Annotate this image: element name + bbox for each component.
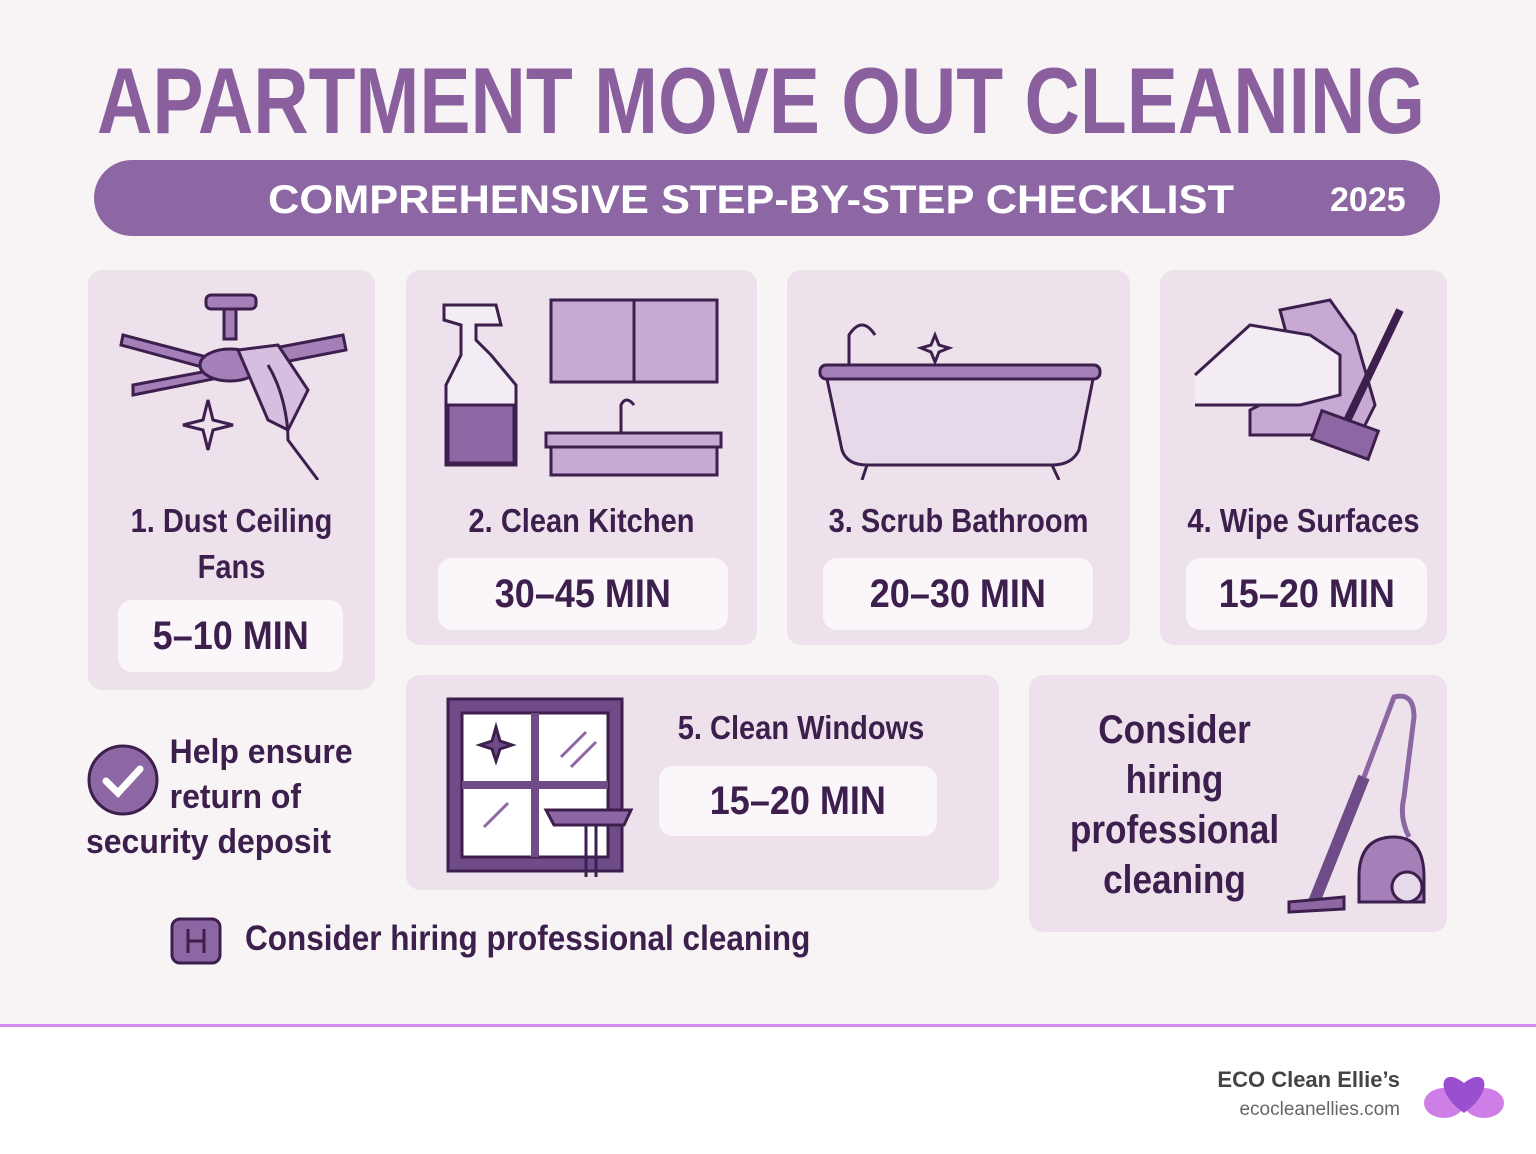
text block: security deposit: return of (170, 778, 301, 816)
time pill (118, 600, 343, 672)
icon: spray and cabinets (442, 298, 722, 476)
time pill (438, 558, 728, 630)
label: 2. Clean Kitchen (469, 502, 694, 539)
banner (94, 160, 1440, 236)
footer (0, 1024, 1536, 1154)
text block: security deposit (86, 733, 353, 861)
time pill (1186, 558, 1427, 630)
text: professional (1070, 808, 1279, 852)
label: 1. Dust Ceiling (131, 502, 332, 539)
icon: hand wiping (1194, 298, 1404, 462)
banner: COMPREHENSIVE STEP-BY-STEP CHECKLIST (268, 178, 1234, 222)
label: 3. Scrub Bathroom (829, 502, 1088, 539)
label: 4. Wipe Surfaces (1187, 502, 1420, 539)
text block: security deposit: Help ensure (170, 733, 353, 771)
text: hiring (1126, 758, 1223, 802)
text (1070, 708, 1279, 902)
brand text: ECO Clean Ellie’s (1217, 1067, 1400, 1092)
text: Consider (1098, 708, 1251, 752)
banner: 2025 (1330, 181, 1406, 219)
panel: clean kitchen (406, 270, 757, 645)
time pill: 15–20 MIN (710, 778, 886, 822)
icon: ceiling fan (119, 294, 348, 480)
icon: square (170, 918, 222, 964)
icon: logo (1424, 1076, 1504, 1118)
text block: security deposit: security deposit (86, 823, 331, 861)
panel: dust ceiling fans (88, 270, 375, 690)
panel: clean windows (406, 675, 999, 890)
label: 5. Clean Windows (678, 709, 924, 746)
icon: vacuum (1288, 694, 1426, 914)
icon: check circle (88, 744, 158, 816)
brand text: ecocleanellies.com (1239, 1099, 1400, 1120)
label: Fans (198, 548, 265, 585)
time pill: 20–30 MIN (870, 572, 1046, 616)
label (131, 502, 332, 585)
icon: window (446, 698, 634, 877)
callout: professional cleaning: Consider hiring professional cleaning (245, 919, 810, 958)
text: cleaning (1103, 858, 1246, 902)
panel: scrub bathroom (787, 270, 1130, 645)
panel: wipe surfaces (1160, 270, 1447, 645)
time pill: 30–45 MIN (495, 572, 671, 616)
time pill (823, 558, 1093, 630)
time pill (659, 766, 937, 836)
brand text (1217, 1067, 1400, 1120)
time pill: 15–20 MIN (1218, 572, 1395, 616)
icon: bathtub (818, 324, 1102, 480)
panel: hire professional (1029, 675, 1447, 932)
time pill: 5–10 MIN (152, 614, 309, 658)
